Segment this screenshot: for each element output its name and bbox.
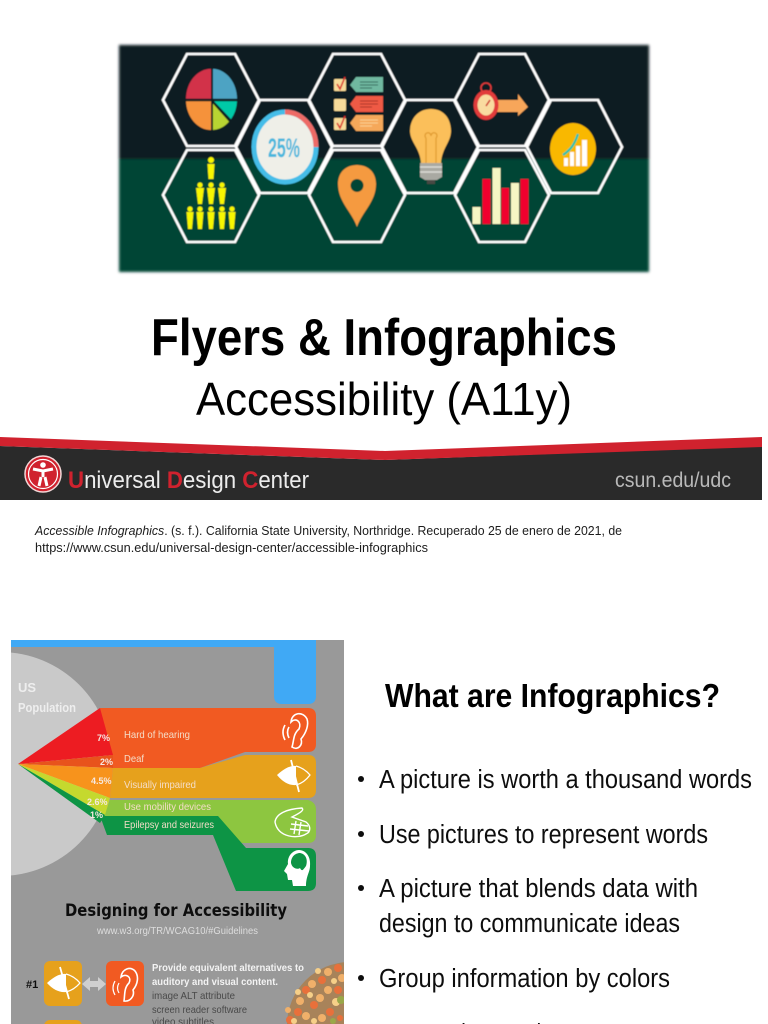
wedge percentages <box>87 733 113 820</box>
band labels: Deaf <box>124 753 144 765</box>
bullet 3: design to communicate ideas <box>379 910 680 938</box>
icon: head <box>284 850 310 886</box>
label: US Population <box>18 683 76 714</box>
rule text: screen reader software <box>152 1004 247 1016</box>
band labels: Epilepsy and seizures <box>124 819 214 831</box>
icon: map pin <box>338 165 376 227</box>
icon tile: eye <box>44 961 82 1006</box>
bullet 4: Group information by colors <box>379 965 670 993</box>
band: vision <box>110 755 316 798</box>
bullet list <box>358 766 752 1024</box>
bullet 2: Use pictures to represent words <box>379 821 708 849</box>
icon: 25 percent ring: 25% <box>268 133 300 163</box>
guidelines URL: www.w3.org/TR/WCAG10/#Guidelines <box>96 926 258 937</box>
site address: csun.edu/udc <box>615 469 731 492</box>
rule text: auditory and visual content. <box>152 976 278 988</box>
red swoosh <box>0 437 762 460</box>
icon: growth badge <box>550 123 596 175</box>
wedge percentages: 2% <box>100 757 113 767</box>
bullet 3: A picture that blends data with <box>379 875 698 903</box>
rule text <box>152 962 304 1024</box>
rule number: #1 <box>26 979 38 991</box>
heading: Designing for Accessibility: Designing for Accessibility <box>65 901 287 921</box>
band: hearing <box>100 708 316 768</box>
wedge percentages: 7% <box>97 733 110 743</box>
icon: checklist <box>334 77 383 131</box>
icon tile: ear <box>106 961 144 1006</box>
pie wedges <box>18 708 113 823</box>
icon: crossed-out eye <box>277 760 310 792</box>
blue frame <box>11 639 316 704</box>
citation: https://www.csun.edu/universal-design-center/accessible-infographics <box>35 541 428 555</box>
label: US Population: Population <box>18 700 76 715</box>
wedge percentages: 4.5% <box>91 776 112 786</box>
icon: ear <box>283 714 308 748</box>
double arrow <box>82 977 106 991</box>
icon: people pyramid <box>186 157 236 229</box>
footer band: Universal Design Center <box>0 437 762 500</box>
icon: bar chart <box>472 168 528 224</box>
band: mobility <box>104 800 316 843</box>
icon: stopwatch with arrow <box>474 83 528 120</box>
bullet 3 <box>358 875 698 938</box>
icon: 25 percent ring <box>254 112 316 182</box>
panel: accessibility infographic <box>11 640 344 1024</box>
icon: accessibility logo <box>25 456 61 492</box>
hexagon outlines <box>163 54 622 242</box>
wedge percentages: 2.6% <box>87 797 108 807</box>
panel background <box>11 640 344 1024</box>
icon: open hand <box>275 808 310 837</box>
heading: What are Infographics?: What are Infographics? <box>385 677 720 714</box>
band labels: Use mobility devices <box>124 801 211 813</box>
banner background <box>119 45 649 272</box>
band labels: Hard of hearing <box>124 729 190 741</box>
dotted colour-blindness plate <box>285 962 344 1024</box>
rule text: image ALT attribute <box>152 990 235 1002</box>
citation <box>34 524 622 555</box>
banner: hexagon icons <box>119 45 649 272</box>
dark band <box>0 446 762 500</box>
population circle <box>11 652 110 876</box>
band: epilepsy <box>100 816 316 891</box>
wedge percentages: 1% <box>90 810 103 820</box>
citation: Accessible Infographics. (s. f.). California State University, Northridge. Recuperado 25 de enero de 2021, de <box>34 524 622 538</box>
title: Flyers & Infographics <box>151 309 617 367</box>
rule text: Provide equivalent alternatives to <box>152 962 304 974</box>
brand name: Universal Design Center <box>68 467 309 494</box>
subtitle: Accessibility (A11y) <box>196 373 572 425</box>
label: US Population: US <box>18 680 36 695</box>
icon: pie chart <box>186 69 237 130</box>
band labels <box>124 729 214 831</box>
icon: light bulb <box>410 109 451 184</box>
next rule tile <box>44 1020 82 1024</box>
band labels: Visually impaired <box>124 779 196 791</box>
